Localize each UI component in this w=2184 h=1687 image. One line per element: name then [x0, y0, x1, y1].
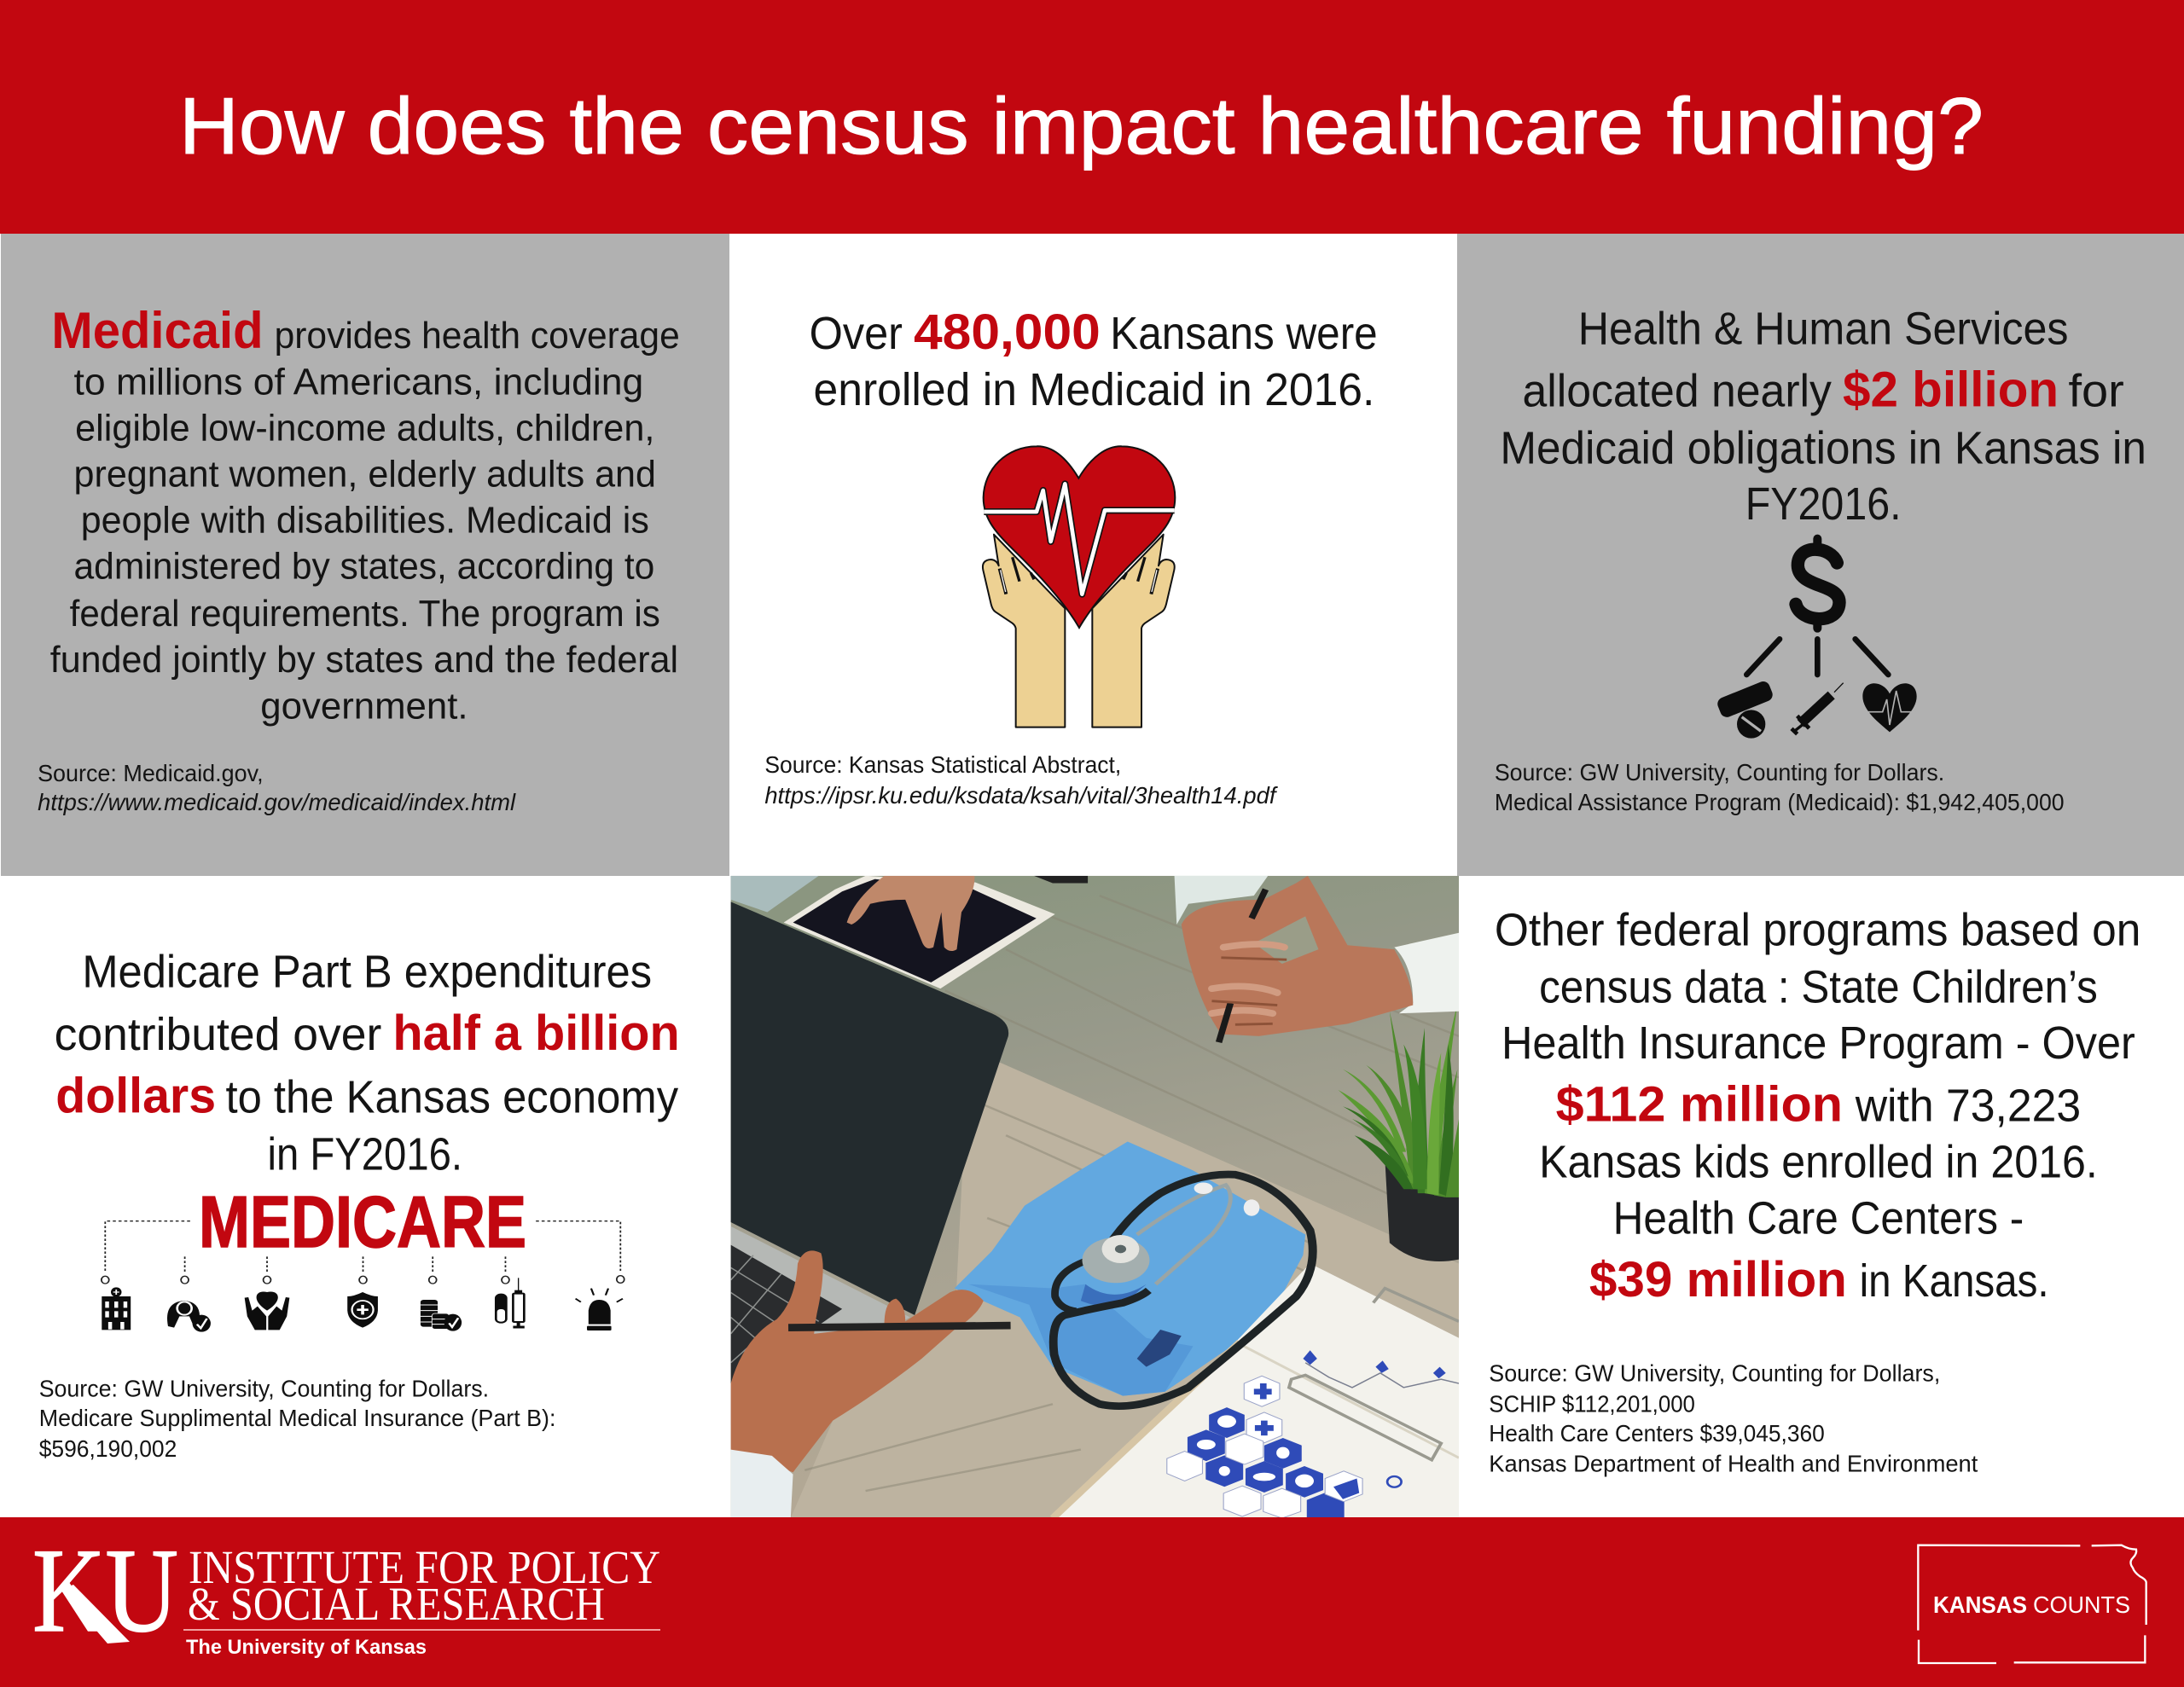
photo: doctors at desk with stethoscope [731, 876, 1459, 1518]
panel: Health and Human Services allocation [1457, 234, 2184, 876]
source: Kansas Statistical Abstract: Source: Kansas Statistical Abstract, [764, 751, 1121, 778]
text block: HHS allocation: Health & Human Services [1578, 303, 2068, 354]
icon: siren [576, 1289, 623, 1330]
icon: hospital [102, 1287, 131, 1330]
source: GW University, Medicare: $596,190,002 [39, 1435, 177, 1462]
logo: KU Institute for Policy and Social Research: The University of Kansas [186, 1636, 427, 1659]
text block: Medicaid description: federal requirements. The program is [70, 594, 660, 635]
text block: HHS allocation: allocated nearly [1522, 366, 1832, 417]
source: GW University, Medicare: Medicare Supplimental Medical Insurance (Part B): [39, 1405, 555, 1431]
text block: enrollment statement [810, 304, 1378, 415]
logo: Kansas Counts [1918, 1545, 2146, 1663]
icon: dollar sign with medical branches [1716, 539, 1917, 739]
icon: coins with check [421, 1300, 462, 1331]
text block: other programs: Kansas kids enrolled in 2016. [1539, 1136, 2098, 1187]
text block: Medicaid description: funded jointly by states and the federal [50, 640, 678, 681]
text block: enrollment statement: 480,000 [914, 304, 1101, 360]
text block: other programs: $112 million [1556, 1076, 1843, 1132]
icon: doctor with check [167, 1301, 211, 1332]
text block: other programs: $39 million [1589, 1252, 1847, 1307]
text block: other programs: census data : State Children’s [1539, 962, 2098, 1013]
heading: MEDICARE: MEDICARE [199, 1182, 526, 1263]
text block: Medicare expenditures: contributed over [55, 1009, 381, 1060]
panel: Medicare Part B [39, 947, 680, 1462]
text block: other programs: with 73,223 [1855, 1080, 2081, 1131]
source: Kansas Statistical Abstract: https://ipsr.ku.edu/ksdata/ksah/vital/3health14.pdf [764, 782, 1279, 809]
text block: enrollment statement: enrolled in Medicaid in 2016. [813, 364, 1374, 415]
text block: HHS allocation: FY2016. [1745, 478, 1902, 530]
source: Medicaid.gov: https://www.medicaid.gov/medicaid/index.html [38, 789, 516, 815]
text block: other programs: Health Insurance Program - Over [1502, 1017, 2135, 1069]
source: Medicaid.gov: Source: Medicaid.gov, [38, 760, 264, 786]
text block: HHS allocation: Medicaid obligations in Kansas in [1500, 423, 2146, 474]
icon row: Medicare services [102, 1221, 624, 1332]
logo: KU Institute for Policy and Social Research: KU [32, 1524, 178, 1657]
logo: Kansas Counts: KANSAS [1933, 1591, 2027, 1618]
text block: Medicaid description: provides health coverage [275, 316, 680, 357]
source: GW University, other programs: Health Care Centers $39,045,360 [1489, 1420, 1825, 1446]
header banner [0, 0, 2184, 234]
logo: Kansas Counts: COUNTS [2033, 1591, 2130, 1618]
logo: KU Institute for Policy and Social Research: & SOCIAL RESEARCH [188, 1578, 605, 1630]
text block: Medicaid description: people with disabilities. Medicaid is [81, 500, 649, 541]
text block: Medicare expenditures: Medicare Part B expenditures [82, 947, 652, 998]
source: Kansas Statistical Abstract [764, 751, 1279, 809]
source: GW University, other programs: SCHIP $112,201,000 [1489, 1391, 1695, 1417]
icon: hands holding heart [983, 446, 1175, 728]
text block: other programs: Other federal programs based on [1495, 905, 2140, 956]
text block: Medicaid description: government. [260, 686, 468, 727]
source: GW University, Medicare: Source: GW University, Counting for Dollars. [39, 1376, 489, 1402]
text block: Medicaid description: eligible low-income adults, children, [75, 408, 654, 449]
text block: HHS allocation: $2 billion [1843, 362, 2059, 418]
text block: enrollment statement: Kansans were [1110, 308, 1378, 359]
text block: Medicare expenditures: dollars [55, 1068, 216, 1123]
panel: Medicaid description [1, 234, 729, 876]
text block: Medicare expenditures: half a billion [392, 1006, 680, 1061]
icon: pill and syringe [495, 1278, 525, 1327]
text block: HHS allocation: for [2068, 366, 2124, 417]
text block: Medicare expenditures: in FY2016. [267, 1128, 462, 1180]
footer band [0, 1517, 2184, 1687]
text block: HHS allocation [1500, 303, 2146, 530]
source: Medicaid.gov [38, 760, 516, 815]
source: GW University, other programs: Kansas Department of Health and Environment [1489, 1451, 1978, 1477]
text block: Medicaid description: to millions of Americans, including [74, 362, 643, 403]
text block: Medicaid description [50, 316, 680, 727]
source: GW University, other programs: Source: GW University, Counting for Dollars, [1489, 1360, 1940, 1387]
source: GW University, Medicaid [1495, 759, 2065, 815]
source: GW University, Medicaid: Source: GW University, Counting for Dollars. [1495, 759, 1944, 786]
text block: other programs: in Kansas. [1860, 1255, 2049, 1307]
source: GW University, Medicare [39, 1376, 555, 1462]
icon: hands with heart [245, 1291, 289, 1330]
heading: Medicaid: Medicaid [51, 301, 264, 359]
icon: shield with cross [347, 1292, 378, 1328]
text block: other programs: Health Care Centers - [1613, 1193, 2024, 1244]
text block: Medicare expenditures [55, 947, 680, 1180]
text block: other programs [1495, 905, 2140, 1307]
text block: Medicare expenditures: to the Kansas economy [225, 1071, 678, 1122]
text block: enrollment statement: Over [810, 308, 903, 359]
title: How does the census impact healthcare funding? [179, 81, 1984, 171]
text block: Medicaid description: administered by states, according to [74, 546, 654, 587]
panel: 480,000 Kansans enrolled [764, 304, 1378, 809]
text block: Medicaid description: pregnant women, elderly adults and [74, 454, 656, 495]
logo: KU Institute for Policy and Social Research [32, 1524, 660, 1659]
source: GW University, other programs [1489, 1360, 1978, 1477]
panel: other federal programs [1489, 905, 2140, 1477]
logo: KU Institute for Policy and Social Research: INSTITUTE FOR POLICY [189, 1541, 660, 1593]
source: GW University, Medicaid: Medical Assistance Program (Medicaid): $1,942,405,000 [1495, 789, 2065, 815]
